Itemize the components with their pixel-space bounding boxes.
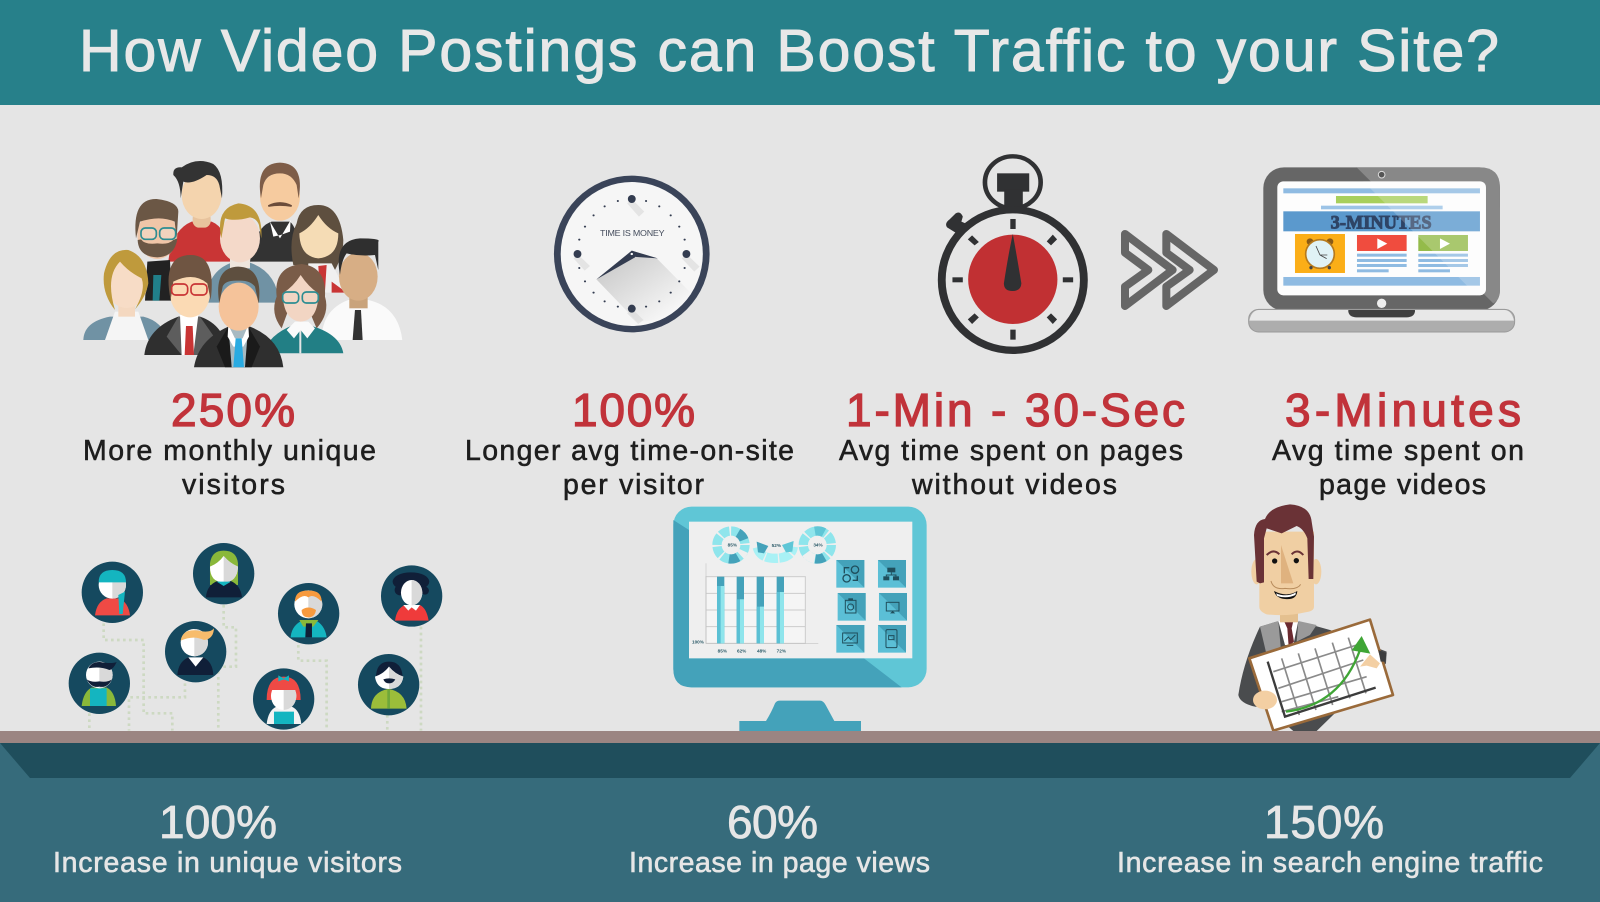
stat: 100 percent: per visitor	[563, 469, 704, 501]
screen: 3-MINUTES	[1331, 212, 1432, 233]
bar chart: 72%	[777, 648, 787, 653]
stat: 3 minutes	[1272, 384, 1524, 501]
arrow: double chevron	[1125, 234, 1214, 306]
bar chart: 62%	[737, 648, 747, 653]
stat: 250 percent: More monthly unique	[83, 435, 376, 467]
stat: increase in search engine traffic: Increase in search engine traffic	[1117, 847, 1543, 879]
person: red shirt	[168, 161, 231, 262]
person: red glasses and dark suit	[144, 255, 228, 355]
icon: dashboard monitor: 52%	[772, 543, 782, 548]
jacket	[1238, 622, 1387, 731]
avatar: blond quiff	[165, 621, 226, 682]
monitor stand	[739, 701, 861, 731]
icon tile: network	[878, 560, 906, 588]
laptop body	[1263, 167, 1500, 311]
person: dark hair with white shirt	[322, 238, 402, 340]
head	[1251, 504, 1321, 615]
icon: dashboard monitor: 85%	[728, 543, 738, 548]
stat: 3 minutes: page videos	[1319, 469, 1486, 501]
screen	[1277, 181, 1486, 295]
avatar: black beard	[69, 653, 130, 714]
person: mustache and vest	[250, 163, 301, 262]
icon: dashboard monitor: 34%	[813, 542, 823, 547]
connected user avatars	[69, 543, 442, 731]
stat: increase in unique visitors: Increase in unique visitors	[53, 847, 402, 879]
stat: 100 percent: 100%	[572, 384, 695, 436]
icon: stopwatch	[942, 156, 1084, 350]
person: woman with teal glasses	[263, 264, 343, 353]
stat: 3 minutes: 3-Minutes	[1285, 384, 1521, 436]
donut chart 52 percent	[757, 541, 794, 558]
person: front man in black suit	[194, 267, 283, 367]
icon: wall clock	[554, 176, 710, 332]
icon tile: chart screen	[836, 625, 864, 653]
stat: increase in search engine traffic	[1117, 796, 1543, 879]
avatar: red hair with bow	[253, 668, 314, 730]
stat: 1 minute 30 seconds: Avg time spent on pages	[839, 435, 1183, 467]
bar chart: 85%	[718, 648, 728, 653]
icon: wall clock: TIME IS MONEY	[600, 228, 665, 238]
icon tile: desktop	[879, 593, 907, 621]
icon: alarm clock thumbnail	[1295, 234, 1345, 273]
icon tile: clipboard	[838, 593, 866, 621]
donut chart 34 percent	[798, 526, 836, 564]
stat: increase in page views	[629, 796, 930, 879]
avatar: teal cap	[82, 562, 143, 623]
icon tile: tablet	[878, 625, 906, 653]
person: blond with blue suit	[206, 203, 279, 303]
laptop base	[1249, 309, 1515, 332]
stat: increase in unique visitors: 100%	[159, 796, 277, 848]
dotted connectors	[89, 605, 421, 731]
bar chart	[692, 563, 818, 653]
header banner	[0, 0, 1600, 105]
stat: 100 percent: Longer avg time-on-site	[465, 435, 794, 467]
stat: 3 minutes: Avg time spent on	[1272, 435, 1524, 467]
avatar: green hair	[193, 543, 254, 604]
title: How Video Postings can Boost Traffic to your Site?	[79, 18, 1499, 84]
stat: 250 percent	[83, 384, 376, 501]
chart board	[1249, 620, 1393, 731]
icon: crowd of people	[83, 161, 402, 367]
avatar: dark curly hair	[381, 565, 442, 627]
person: blond woman	[83, 250, 167, 340]
bar chart: 48%	[757, 648, 767, 653]
bar chart: 100%	[692, 640, 705, 645]
person: bearded with teal glasses	[135, 199, 178, 301]
stat: 1 minute 30 seconds: without videos	[911, 469, 1117, 501]
stat: 250 percent: 250%	[171, 384, 295, 436]
footer panel	[0, 731, 1600, 902]
stat: increase in page views: 60%	[727, 796, 818, 848]
stat: increase in page views: Increase in page views	[629, 847, 930, 879]
stat: 100 percent	[465, 384, 794, 501]
stat: 1 minute 30 seconds: 1-Min - 30-Sec	[846, 384, 1185, 436]
avatar: smiling green shirt	[358, 654, 419, 715]
stat: 1 minute 30 seconds	[839, 384, 1185, 501]
stat: increase in unique visitors	[53, 796, 402, 879]
icon tile: money exchange	[836, 560, 864, 588]
icon: businessman with growth chart	[1238, 504, 1393, 731]
person: woman with brown hair	[291, 205, 347, 293]
monitor body	[673, 507, 927, 687]
icon: laptop with video page	[1249, 167, 1515, 332]
avatar: orange beard	[278, 583, 339, 644]
stat: increase in search engine traffic: 150%	[1264, 796, 1384, 848]
donut chart 85 percent	[712, 526, 750, 564]
icon: dashboard monitor	[673, 507, 927, 731]
stat: 250 percent: visitors	[182, 469, 285, 501]
